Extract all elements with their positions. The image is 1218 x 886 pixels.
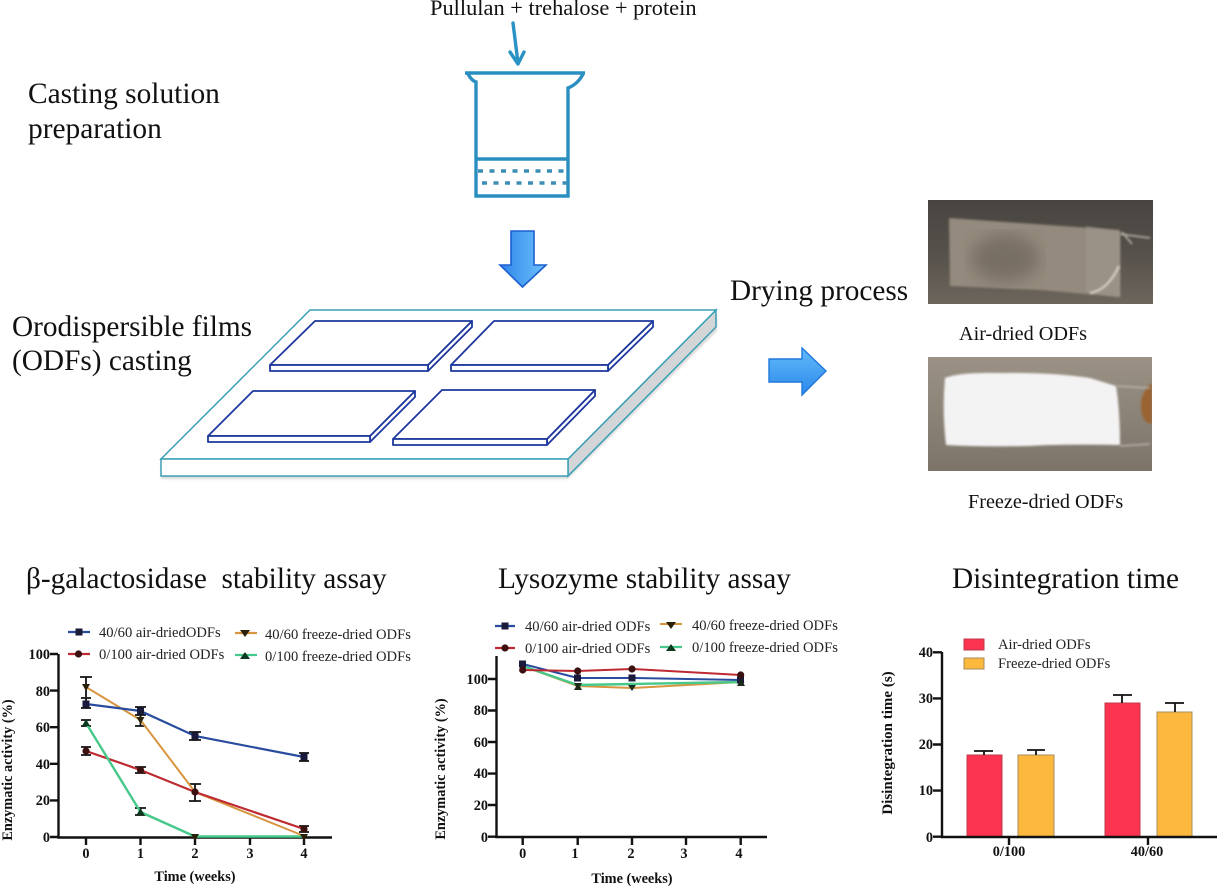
title: lysozyme stability assay: Lysozyme stability assay: [498, 563, 791, 595]
legend: [495, 618, 838, 657]
x tick labels: 1: [137, 846, 144, 862]
arrow: down to casting: [500, 231, 546, 287]
heading: orodispersible films casting: (ODFs) casting: [12, 345, 192, 377]
y tick labels: 20: [474, 798, 488, 814]
x tick labels: 4: [300, 846, 308, 862]
legend: 0/100 freeze-dried ODFs: [265, 649, 411, 665]
error bars: [80, 677, 309, 832]
x tick labels: [82, 846, 308, 862]
y axis title: Disintegration time (s): [880, 671, 896, 815]
x axis title: Time (weeks): [154, 869, 236, 885]
y tick labels: 20: [919, 737, 933, 753]
series: 40/60 freeze-dried: [523, 666, 741, 688]
error bars: [974, 695, 1184, 755]
arrow: input into beaker: [510, 23, 524, 64]
photo: freeze-dried film: [928, 357, 1152, 471]
label: freeze-dried ODFs: Freeze-dried ODFs: [968, 491, 1123, 513]
heading: drying process: Drying process: [730, 275, 908, 307]
chart: disintegration time bar chart: [880, 637, 1217, 860]
y tick labels: 10: [919, 783, 933, 799]
film: top right: [451, 321, 653, 371]
y tick labels: 40: [474, 766, 488, 782]
photo: air-dried film: [928, 200, 1153, 304]
x tick labels: 0: [82, 846, 90, 862]
y axis title: Enzymatic activity (%): [0, 699, 16, 841]
y tick labels: 0: [481, 830, 488, 846]
icon: casting beaker: [465, 73, 585, 196]
y tick labels: 60: [36, 720, 50, 736]
y tick labels: 80: [36, 684, 50, 700]
title: disintegration time: Disintegration time: [952, 563, 1179, 595]
x tick labels: [519, 846, 743, 862]
film: bottom right: [393, 390, 595, 445]
heading: orodispersible films casting: Orodispersible films: [12, 311, 252, 343]
y tick labels: [29, 647, 50, 846]
legend: 0/100 air-dried ODFs: [525, 641, 651, 657]
y tick labels: 100: [29, 647, 50, 663]
series: 0/100 air-dried: [523, 669, 741, 675]
markers: [519, 660, 744, 684]
chart: beta-galactosidase line chart: [0, 625, 411, 885]
film: bottom left: [208, 391, 415, 442]
heading: casting solution preparation: preparation: [28, 113, 162, 145]
x tick labels: 2: [191, 846, 199, 862]
y tick labels: 0: [926, 830, 933, 846]
title: beta-galactosidase stability assay: β-galactosidase stability assay: [26, 563, 387, 595]
x tick labels: 3: [246, 846, 254, 862]
series: 0/100 freeze-dried: [523, 666, 741, 685]
x tick labels: 4: [735, 846, 743, 862]
x tick labels: 1: [571, 846, 579, 862]
legend: 40/60 air-dried ODFs: [525, 619, 651, 635]
legend: [68, 625, 411, 665]
y tick labels: 20: [36, 793, 50, 809]
legend: 40/60 air-driedODFs: [99, 625, 221, 641]
y tick labels: 0: [43, 830, 50, 846]
legend: 0/100 air-dried ODFs: [99, 647, 225, 663]
series: 40/60 air-dried: [86, 704, 304, 757]
film: top left: [270, 321, 472, 371]
y tick labels: 40: [36, 757, 50, 773]
series: 40/60 freeze-dried: [86, 687, 304, 836]
x tick labels: 0: [519, 846, 526, 862]
legend: Air-dried ODFs: [998, 637, 1091, 653]
x tick labels: 40/60: [1131, 844, 1163, 860]
legend: [964, 637, 1111, 672]
y tick labels: 80: [474, 703, 488, 719]
y tick labels: [467, 672, 488, 846]
legend: 0/100 freeze-dried ODFs: [692, 640, 838, 656]
x tick labels: 2: [627, 846, 635, 862]
markers: [82, 700, 308, 760]
legend: Freeze-dried ODFs: [998, 656, 1111, 672]
y axis title: Enzymatic activity (%): [433, 698, 449, 840]
series: 0/100 air-dried: [86, 751, 304, 829]
x tick labels: 3: [680, 846, 688, 862]
y tick labels: 60: [474, 735, 488, 751]
axes: [933, 652, 1217, 845]
series: 40/60 air-dried: [523, 664, 741, 680]
diagram: casting plate with four films: [161, 310, 717, 479]
chart: lysozyme line chart: [433, 618, 838, 886]
y tick labels: 100: [467, 672, 488, 688]
arrow: right to drying: [769, 348, 826, 395]
y tick labels: [919, 645, 933, 846]
axes: [488, 656, 767, 845]
x tick labels: 0/100: [993, 844, 1025, 860]
label: air-dried ODFs: Air-dried ODFs: [959, 323, 1087, 345]
series: 0/100 freeze-dried: [86, 723, 304, 836]
bars: [967, 703, 1192, 837]
heading: casting solution preparation: Casting solution: [28, 78, 220, 110]
axes: [50, 654, 332, 845]
x tick labels: [993, 844, 1163, 860]
legend: 40/60 freeze-dried ODFs: [265, 627, 411, 643]
y tick labels: 30: [919, 691, 933, 707]
y tick labels: 40: [919, 645, 933, 661]
legend: 40/60 freeze-dried ODFs: [692, 618, 838, 634]
